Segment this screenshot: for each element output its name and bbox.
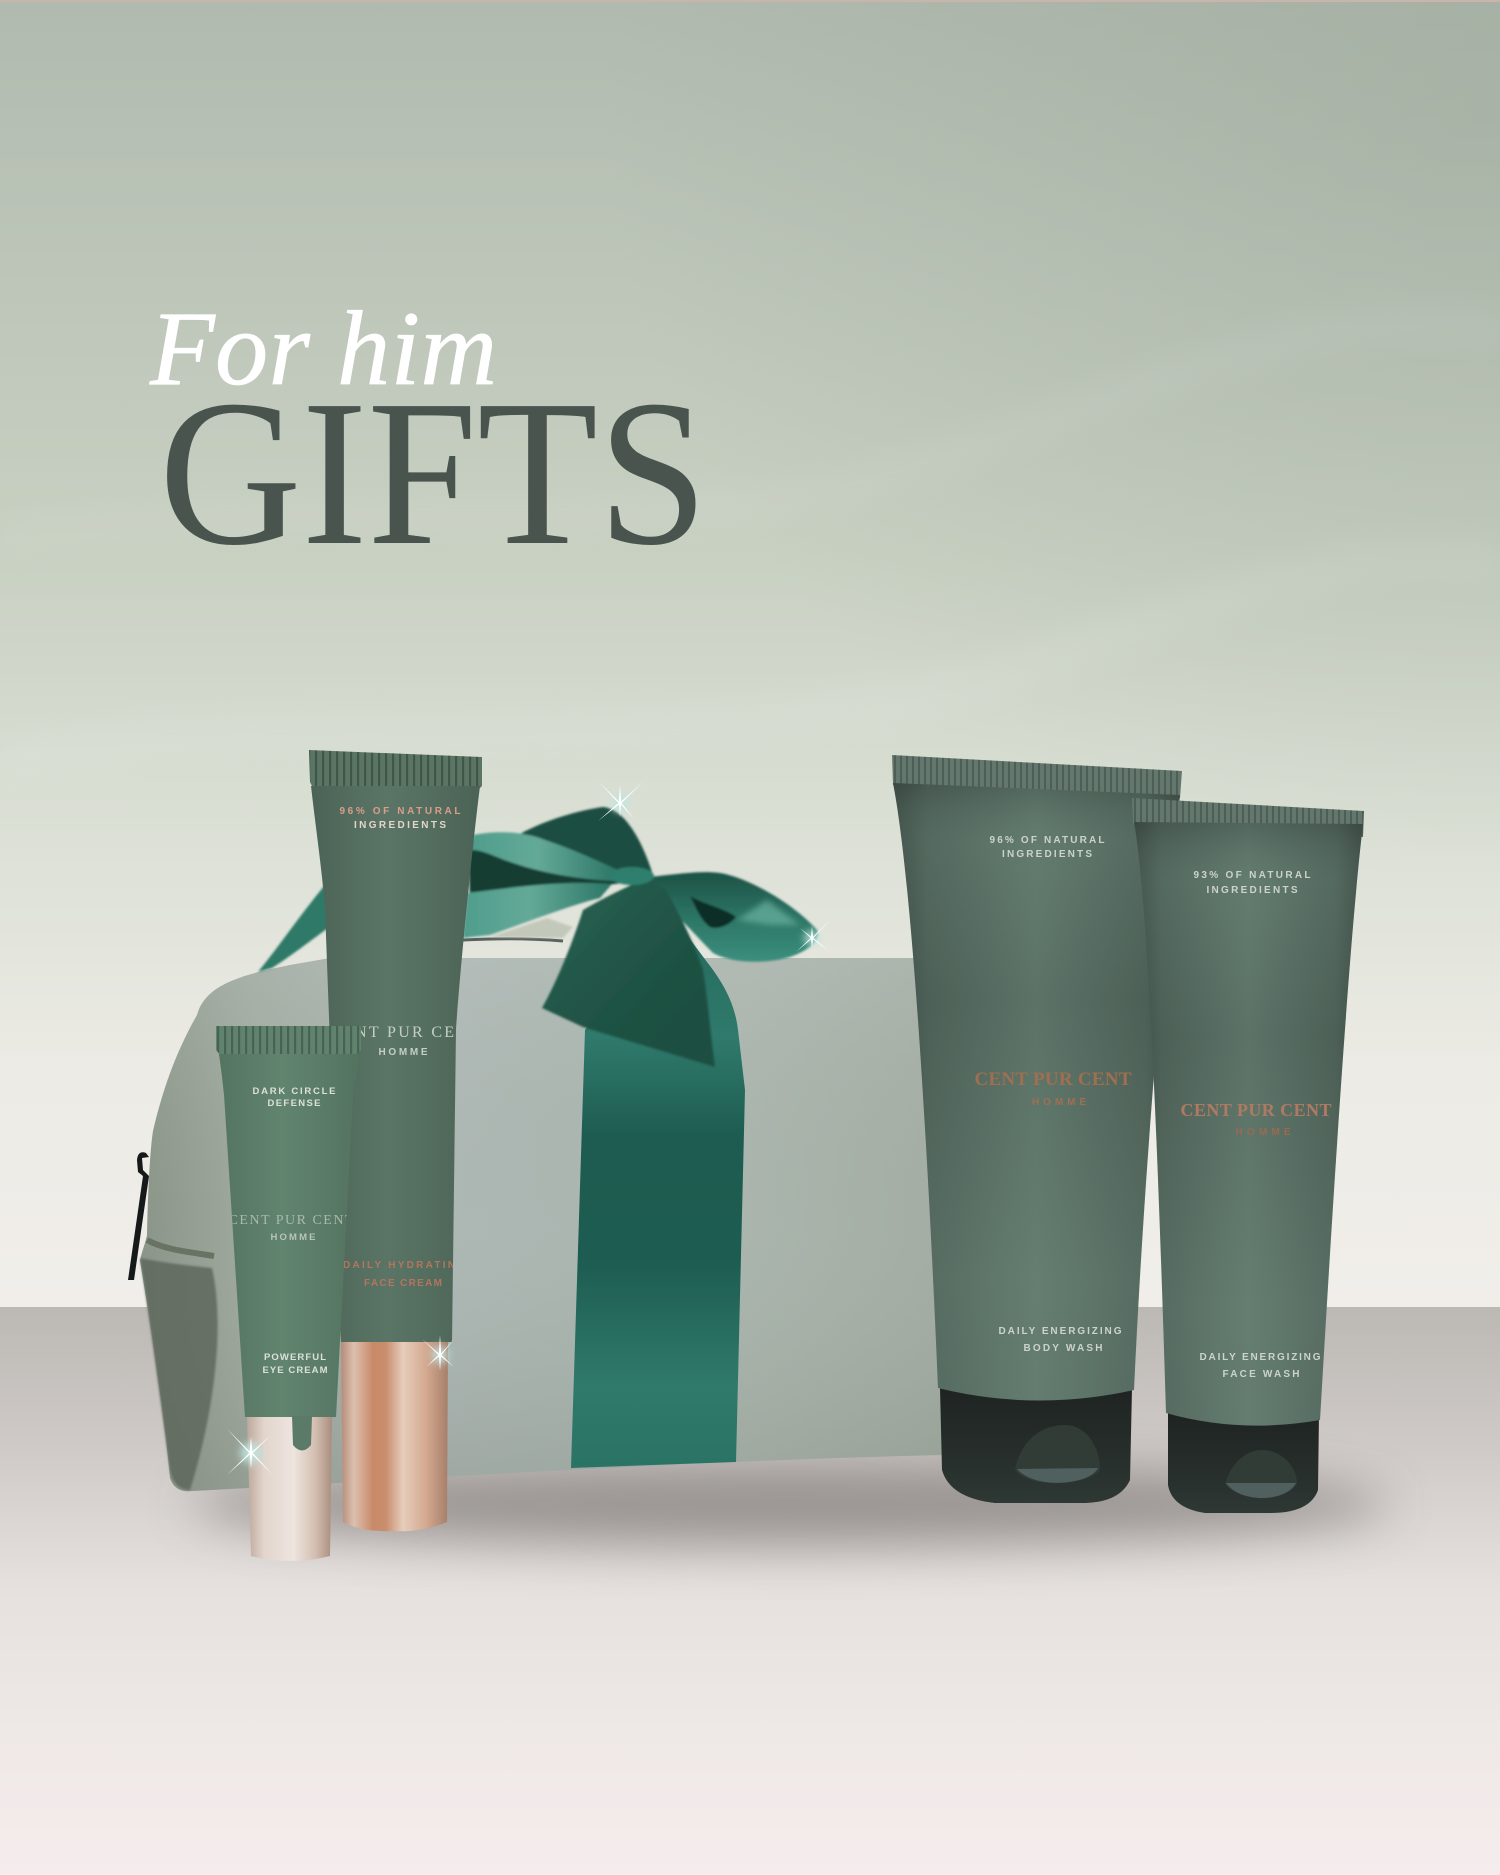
tail <box>542 880 715 1067</box>
label text: DEFENSE <box>268 1098 320 1109</box>
body <box>311 786 480 1342</box>
zipper pull <box>128 1152 149 1280</box>
upper loop <box>520 807 652 872</box>
label text: 96% OF NATURAL <box>990 835 1104 846</box>
label text <box>974 835 1132 1354</box>
cap notch <box>292 1416 312 1450</box>
knot <box>610 867 654 885</box>
background wall <box>0 0 1500 1307</box>
zipper seam <box>147 1240 214 1256</box>
crimp <box>1132 798 1364 837</box>
cap <box>247 1417 332 1561</box>
body <box>893 783 1180 1401</box>
label text: POWERFUL <box>264 1352 326 1363</box>
label text: INGREDIENTS <box>1002 849 1092 860</box>
toiletry bag <box>128 939 945 1491</box>
label text: 96% OF NATURAL <box>340 806 460 817</box>
icon: sparkle on eye cream cap <box>227 1429 273 1475</box>
bag top edge <box>463 939 563 941</box>
icon: sparkle on bow right <box>796 920 830 952</box>
right loop highlight <box>737 900 800 925</box>
label text: HOMME <box>378 1047 428 1058</box>
label text: DAILY HYDRATING <box>343 1260 465 1271</box>
tube: face wash <box>1132 798 1364 1513</box>
tube: body wash <box>892 755 1182 1503</box>
cap notch highlight <box>1226 1483 1296 1498</box>
right loop <box>640 872 818 962</box>
right loop fold <box>690 896 736 928</box>
label text: HOMME <box>270 1232 316 1243</box>
cap notch <box>1015 1425 1100 1483</box>
tube: eye cream <box>216 1026 361 1561</box>
title <box>149 290 708 588</box>
cap <box>341 1338 448 1531</box>
heading: GIFTS: GIFTS <box>159 357 708 588</box>
lower left strand <box>463 883 612 938</box>
label text: DAILY ENERGIZING <box>998 1326 1122 1337</box>
cap notch <box>1225 1450 1297 1498</box>
label text: CENT PUR CENT <box>228 1213 354 1228</box>
label text: FACE WASH <box>1222 1369 1300 1380</box>
label text <box>340 807 460 1286</box>
ribbon bow <box>258 807 818 1067</box>
cap <box>940 1388 1132 1503</box>
label text <box>1180 870 1332 1380</box>
left strand to bag <box>258 885 332 972</box>
body <box>1134 822 1363 1426</box>
label text: FACE CREAM <box>364 1278 442 1289</box>
upper left strand <box>472 832 618 881</box>
label text: CENT PUR CENT <box>1180 1100 1332 1120</box>
cap <box>1168 1413 1319 1513</box>
label text: CENT PUR CENT <box>330 1024 480 1041</box>
crimp <box>216 1026 361 1056</box>
beige bag handle <box>490 918 573 938</box>
body <box>219 1054 359 1417</box>
label text: INGREDIENTS <box>354 820 446 831</box>
label text: BODY WASH <box>1024 1343 1102 1354</box>
label text: CENT PUR CENT <box>974 1069 1132 1090</box>
crimp <box>309 750 482 790</box>
label text: HOMME <box>1236 1127 1291 1138</box>
tube: face cream <box>309 750 482 1531</box>
label text <box>228 1086 354 1376</box>
ribbon band <box>571 915 745 1468</box>
label text: DAILY ENERGIZING <box>1200 1352 1321 1363</box>
crimp <box>892 755 1182 798</box>
floor shadow <box>190 1463 1390 1547</box>
label text: DARK CIRCLE <box>252 1086 336 1097</box>
label text: INGREDIENTS <box>1206 885 1298 896</box>
label text: EYE CREAM <box>262 1365 328 1376</box>
icon: sparkle on face cream cap <box>422 1335 454 1371</box>
subtitle: For him: For him <box>149 290 497 407</box>
icon: sparkle on bow top <box>598 781 644 821</box>
cap notch highlight <box>1017 1468 1098 1483</box>
dark backing <box>468 839 650 900</box>
label text: HOMME <box>1032 1097 1086 1108</box>
floor surface <box>0 1307 1500 1875</box>
lower left panel <box>140 1258 218 1490</box>
label text: 93% OF NATURAL <box>1194 870 1310 881</box>
